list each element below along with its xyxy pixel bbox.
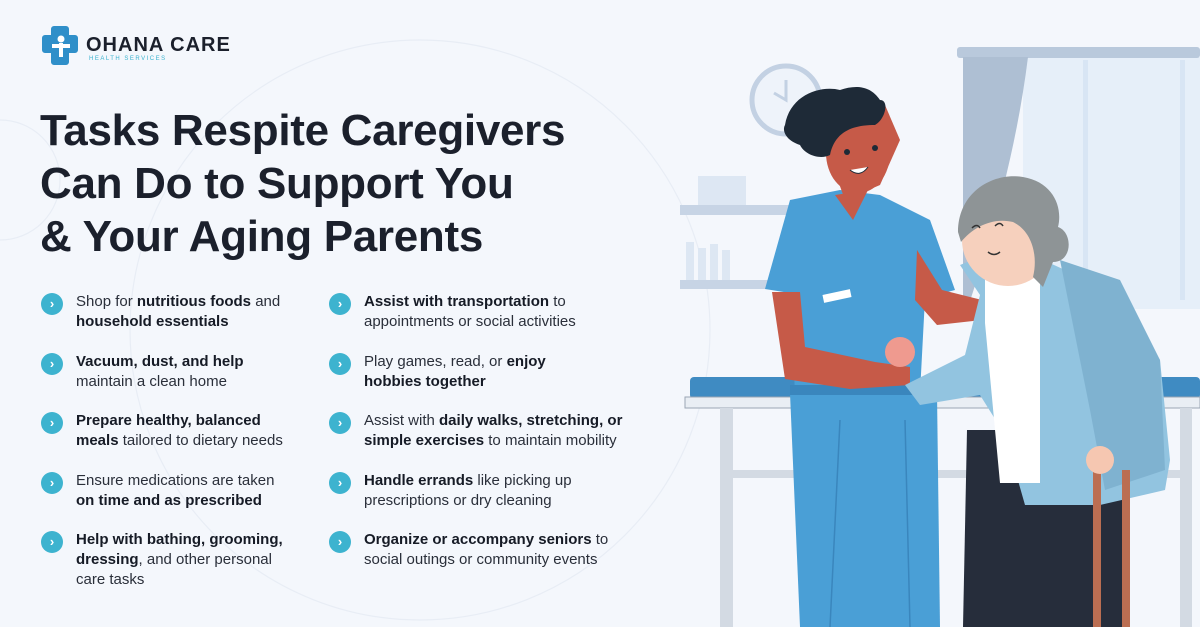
- list: column 1: ›: [50, 356, 54, 371]
- list: column 1: [41, 293, 283, 588]
- item 6: Assist with transportation to: [364, 293, 566, 310]
- item 8: Assist with daily walks, stretching, or: [364, 412, 622, 429]
- logo: OHANA CARE: [86, 34, 231, 56]
- title: [40, 106, 565, 261]
- room background: [680, 47, 1200, 317]
- item 10: social outings or community events: [364, 551, 597, 568]
- table: [685, 377, 1200, 627]
- list: column 1: ›: [50, 415, 54, 430]
- item 4: Ensure medications are taken: [76, 472, 274, 489]
- item 10: [329, 531, 608, 568]
- item 5: dressing, and other personal: [76, 551, 272, 568]
- item 5: care tasks: [76, 571, 144, 588]
- item 6: appointments or social activities: [364, 313, 576, 330]
- list: column 2: ›: [338, 415, 342, 430]
- item 7: Play games, read, or enjoy: [364, 353, 546, 370]
- item 2: [41, 353, 244, 390]
- item 1: [41, 293, 280, 330]
- logo: [42, 26, 231, 65]
- elderly woman: [905, 176, 1170, 627]
- list: column 2: ›: [338, 534, 342, 549]
- list: column 1: ›: [50, 534, 54, 549]
- item 9: prescriptions or dry cleaning: [364, 492, 552, 509]
- item 6: [329, 293, 576, 330]
- list: column 2: [329, 293, 622, 568]
- item 7: [329, 353, 546, 390]
- item 9: Handle errands like picking up: [364, 472, 572, 489]
- item 4: [41, 472, 274, 509]
- list: column 2: ›: [338, 356, 342, 371]
- item 2: Vacuum, dust, and help: [76, 353, 244, 370]
- title: & Your Aging Parents: [40, 212, 483, 261]
- item 3: [41, 412, 283, 449]
- item 1: Shop for nutritious foods and: [76, 293, 280, 310]
- item 9: [329, 472, 572, 509]
- list: column 2: ›: [338, 475, 342, 490]
- list: column 1: ›: [50, 296, 54, 311]
- item 4: on time and as prescribed: [76, 492, 262, 509]
- item 7: hobbies together: [364, 373, 486, 390]
- list: column 1: ›: [50, 475, 54, 490]
- title: Can Do to Support You: [40, 159, 514, 208]
- item 5: Help with bathing, grooming,: [76, 531, 283, 548]
- item 10: Organize or accompany seniors to: [364, 531, 608, 548]
- item 3: meals tailored to dietary needs: [76, 432, 283, 449]
- item 1: household essentials: [76, 313, 229, 330]
- logo: HEALTH SERVICES: [89, 56, 167, 62]
- caregiver: [765, 87, 982, 627]
- item 5: [41, 531, 283, 588]
- item 2: maintain a clean home: [76, 373, 227, 390]
- item 8: simple exercises to maintain mobility: [364, 432, 617, 449]
- item 8: [329, 412, 622, 449]
- item 3: Prepare healthy, balanced: [76, 412, 261, 429]
- list: column 2: ›: [338, 296, 342, 311]
- title: Tasks Respite Caregivers: [40, 106, 565, 155]
